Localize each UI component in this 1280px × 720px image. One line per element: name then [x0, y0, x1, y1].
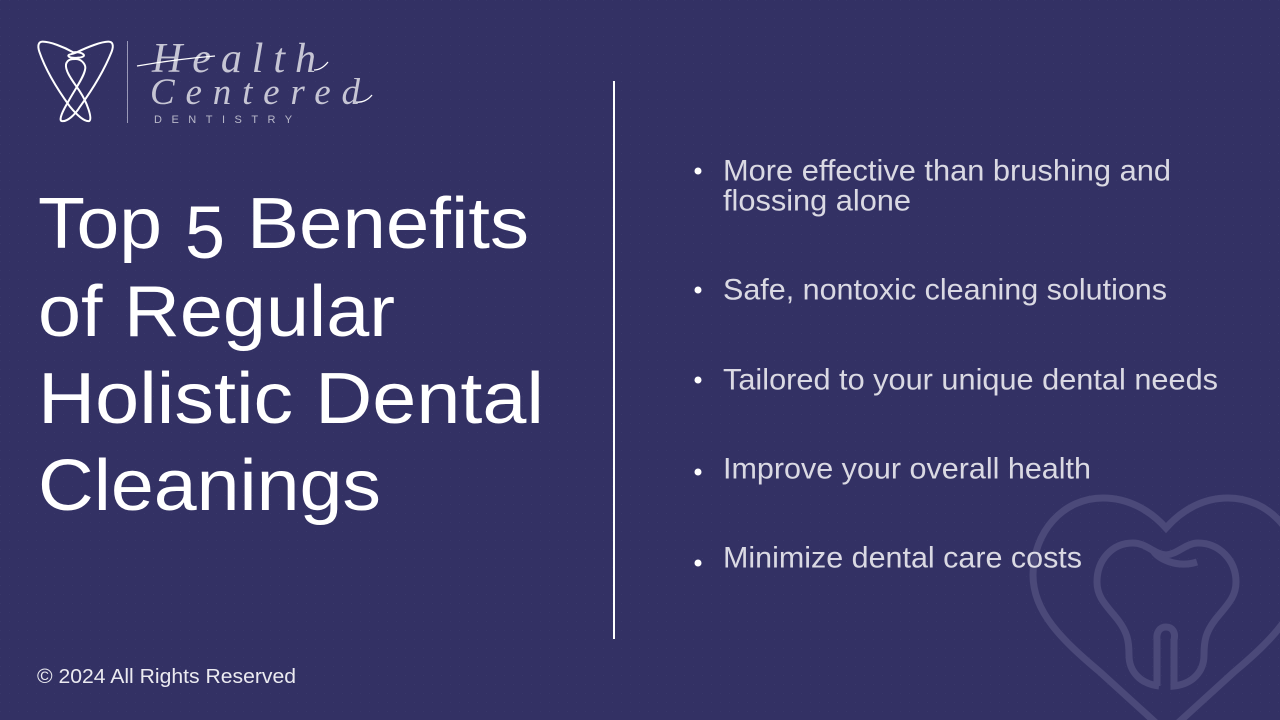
title: Benefits: [247, 184, 529, 264]
watermark heart outline: [1033, 498, 1280, 720]
title: [38, 184, 544, 526]
watermark tooth smile line: [1152, 549, 1197, 564]
title: Top: [38, 184, 162, 264]
title: of Regular: [38, 272, 395, 352]
logo wordmark: Dentistry: DENTISTRY: [154, 114, 302, 126]
footer copyright: © 2024 All Rights Reserved: [37, 666, 296, 688]
benefit 2: Safe, nontoxic cleaning solutions: [723, 274, 1167, 306]
benefit 1: More effective than brushing and: [723, 154, 1171, 188]
benefit 4: Improve your overall health: [723, 452, 1091, 486]
watermark: heart with tooth: [1033, 498, 1280, 720]
logo flourish: Health crossbar and tail: [137, 56, 328, 70]
benefit 3: Tailored to your unique dental needs: [723, 364, 1218, 396]
benefit 5: Minimize dental care costs: [723, 542, 1082, 574]
logo wordmark: Centered: Centered: [150, 72, 360, 113]
benefit 1: flossing alone: [723, 184, 911, 218]
watermark tooth outline: [1097, 543, 1236, 686]
benefits list: [694, 154, 1218, 574]
logo flourish: Centered tail: [356, 95, 372, 102]
logo wordmark: Health: Health: [151, 36, 316, 82]
title: Cleanings: [38, 446, 381, 526]
title: Holistic Dental: [38, 359, 544, 439]
logo: [38, 36, 372, 126]
logo tooth mark: [38, 42, 113, 121]
vertical divider: [613, 81, 615, 639]
title: 5: [185, 191, 225, 274]
logo divider: [127, 41, 128, 123]
benefit 1: [694, 154, 1171, 218]
